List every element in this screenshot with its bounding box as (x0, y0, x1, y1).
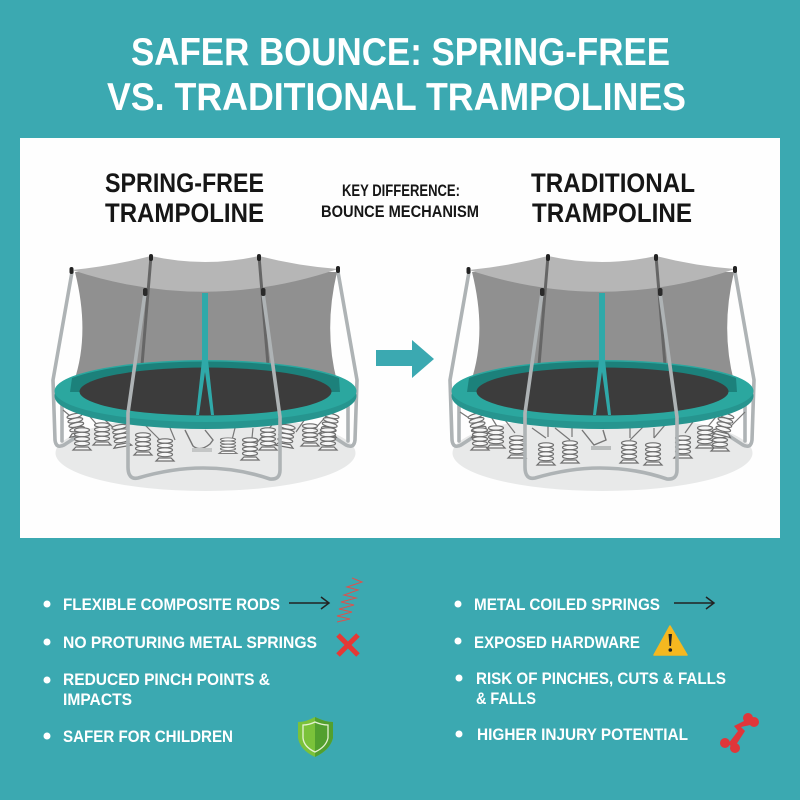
heading: traditional trampoline: TRADITIONAL (531, 168, 695, 198)
icon: warning triangle (654, 626, 687, 655)
list: spring-free benefits: IMPACTS (63, 691, 132, 709)
heading: spring-free trampoline (105, 168, 264, 228)
title: SAFER BOUNCE: SPRING-FREE (131, 31, 670, 74)
heading: traditional trampoline: TRAMPOLINE (532, 198, 692, 228)
list: spring-free benefits (44, 596, 317, 746)
list: spring-free benefits: REDUCED PINCH POINTS & (63, 671, 270, 689)
list: traditional trampoline risks: & FALLS (476, 690, 536, 708)
arrow: comparison (376, 340, 434, 378)
list: traditional trampoline risks: EXPOSED HARDWARE (474, 634, 640, 652)
list: traditional trampoline risks: HIGHER INJURY POTENTIAL (477, 726, 688, 744)
title: VS. TRADITIONAL TRAMPOLINES (107, 76, 686, 119)
heading: traditional trampoline (531, 168, 695, 228)
icon: red injury bone (720, 713, 759, 753)
list: traditional trampoline risks (454, 596, 726, 744)
list: spring-free benefits: FLEXIBLE COMPOSITE RODS (63, 596, 280, 614)
panel: comparison illustration (20, 138, 780, 538)
list: spring-free benefits: NO PROTURING METAL SPRINGS (63, 634, 317, 652)
title (107, 31, 686, 119)
heading: key difference (321, 182, 479, 221)
icon: red spring (337, 578, 362, 622)
heading: spring-free trampoline: TRAMPOLINE (105, 198, 264, 228)
list: traditional trampoline risks: METAL COILED SPRINGS (474, 596, 660, 614)
heading: key difference: KEY DIFFERENCE: (342, 182, 460, 200)
icon: arrow to spring (289, 597, 329, 609)
illustration: spring-free trampoline (53, 254, 357, 491)
heading: key difference: BOUNCE MECHANISM (321, 203, 479, 221)
heading: spring-free trampoline: SPRING-FREE (105, 168, 264, 198)
icon: green shield (298, 717, 333, 757)
list: traditional trampoline risks: RISK OF PINCHES, CUTS & FALLS (476, 670, 726, 688)
icon: red cross (338, 635, 358, 655)
icon: arrow (674, 597, 714, 609)
list: spring-free benefits: SAFER FOR CHILDREN (63, 728, 233, 746)
illustration: traditional trampoline (450, 254, 754, 491)
